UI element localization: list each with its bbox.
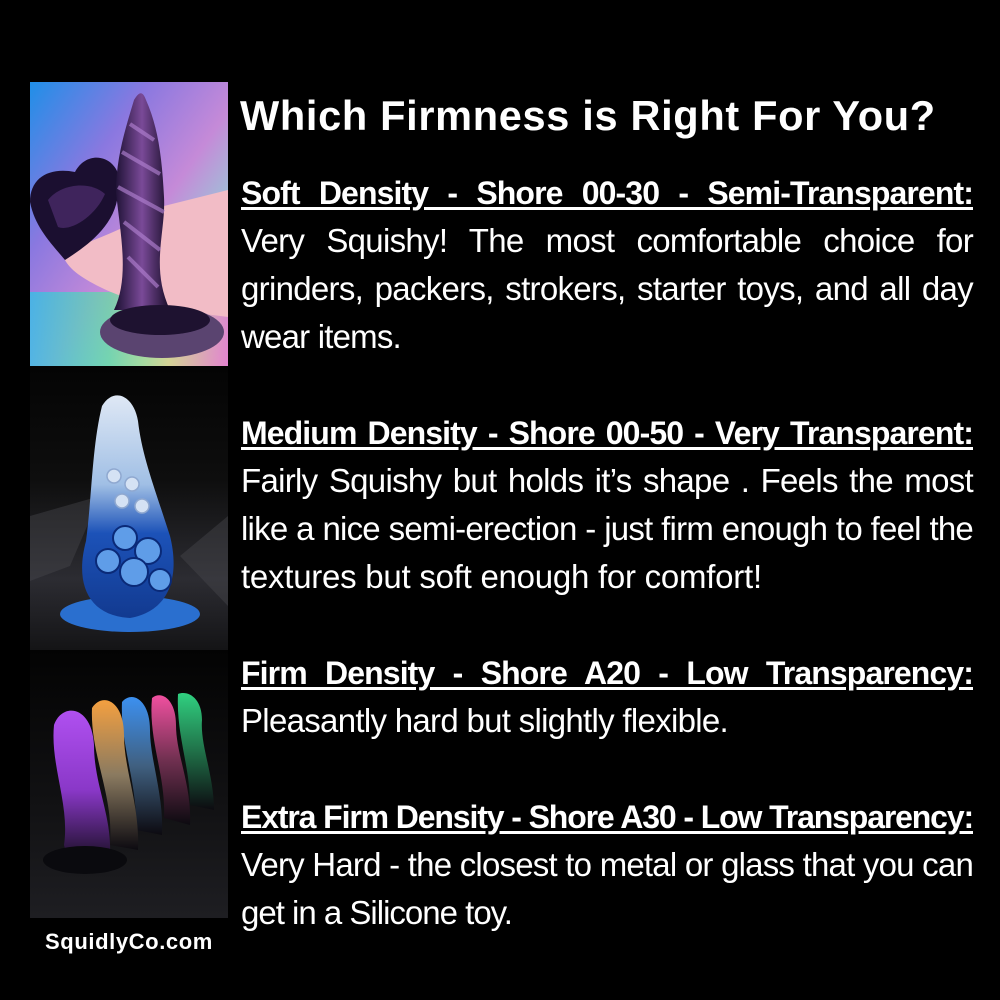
- text block: soft density: [241, 175, 974, 355]
- text block: firm density: [241, 655, 973, 739]
- heading: firm density: Firm Density - Shore A20 - Low Transparency:: [241, 655, 973, 691]
- description line 2: get in a Silicone toy.: [241, 894, 512, 931]
- heading: medium density: Medium Density - Shore 00-50 - Very Transparent:: [241, 415, 973, 451]
- description line 2: like a nice semi-erection - just firm enough to feel the: [241, 510, 973, 547]
- description line 1: Fairly Squishy but holds it’s shape . Feels the most: [241, 462, 973, 499]
- photo: blue and white sculpted object on dark fabric: [30, 395, 228, 650]
- brand website: SquidlyCo.com: [45, 929, 213, 954]
- title: Which Firmness is Right For You?: [240, 92, 936, 139]
- description line 1: Very Squishy! The most comfortable choice for: [241, 222, 973, 259]
- description line 1: Very Hard - the closest to metal or glass that you can: [241, 846, 973, 883]
- text block: medium density: [241, 415, 974, 595]
- photo: rainbow background with purple spiral object held in hand: [30, 82, 228, 366]
- heading: soft density: Soft Density - Shore 00-30 - Semi-Transparent:: [241, 175, 973, 211]
- description line 1: Pleasantly hard but slightly flexible.: [241, 702, 728, 739]
- description line 2: grinders, packers, strokers, starter toys, and all day: [241, 270, 973, 307]
- photo: five multicoloured objects lined up on dark fabric: [30, 693, 228, 918]
- text block: extra firm density: [241, 799, 973, 931]
- description line 3: wear items.: [241, 318, 401, 355]
- heading: extra firm density: Extra Firm Density - Shore A30 - Low Transparency:: [241, 799, 973, 835]
- description line 3: textures but soft enough for comfort!: [241, 558, 762, 595]
